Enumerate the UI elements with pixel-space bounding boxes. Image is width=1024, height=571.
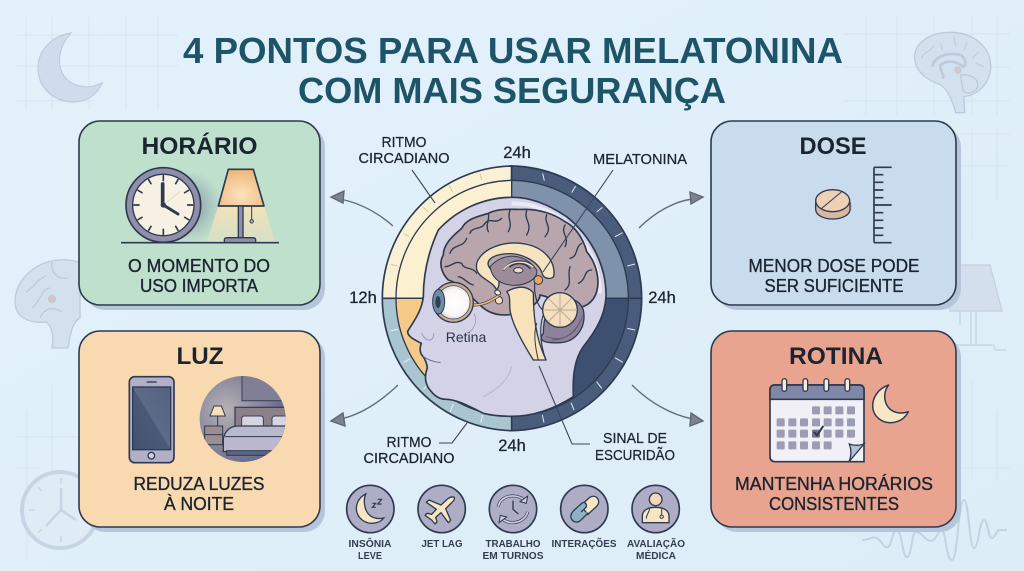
icon: dim bedroom bbox=[200, 376, 286, 462]
icon: avaliação médica: AVALIAÇÃO bbox=[627, 537, 685, 550]
text: reduza luzes à noite: REDUZA LUZES bbox=[134, 474, 264, 494]
text: mantenha horários consistentes bbox=[735, 474, 933, 514]
title: COM MAIS SEGURANÇA bbox=[298, 70, 726, 111]
label: 24h right: 24h bbox=[648, 289, 676, 307]
arrow: to dose bbox=[639, 192, 703, 228]
arrow: to rotina bbox=[632, 385, 703, 426]
decorative brain top right bbox=[914, 32, 991, 113]
icon: dose ruler bbox=[874, 167, 892, 243]
label: ritmo circadiano top: CIRCADIANO bbox=[358, 150, 450, 167]
label: 24h bottom: 24h bbox=[498, 437, 526, 455]
heading: rotina: ROTINA bbox=[789, 343, 883, 370]
text: o momento do uso importa bbox=[128, 256, 270, 296]
label: ritmo circadiano bottom bbox=[364, 434, 454, 467]
text: menor dose pode ser suficiente: MENOR DOSE PODE bbox=[748, 256, 920, 276]
inner disc: day and night quadrants bbox=[396, 180, 628, 416]
label: 24h top: 24h bbox=[503, 144, 531, 162]
label: ritmo circadiano bottom: RITMO bbox=[386, 434, 432, 451]
text: o momento do uso importa: O MOMENTO DO bbox=[128, 256, 270, 276]
label: 12h: 12h bbox=[349, 289, 377, 307]
label: sinal de escuridão: SINAL DE bbox=[603, 430, 667, 447]
decorative clock bottom left bbox=[22, 472, 98, 548]
icon: trabalho em turnos bbox=[482, 485, 544, 562]
label: sinal de escuridão bbox=[595, 430, 675, 464]
heading: luz: LUZ bbox=[176, 343, 224, 370]
text: menor dose pode ser suficiente: SER SUFICIENTE bbox=[764, 276, 904, 296]
decorative brain left bbox=[15, 260, 80, 348]
ring tick marks bbox=[391, 173, 635, 423]
icon: tablet bbox=[816, 190, 852, 219]
text: reduza luzes à noite: À NOITE bbox=[164, 494, 234, 514]
heading: horário: HORÁRIO bbox=[142, 132, 258, 160]
icon: avaliação médica: MÉDICA bbox=[636, 549, 676, 562]
icon: calendar bbox=[770, 379, 864, 462]
brain bbox=[441, 209, 598, 360]
panel: horário bbox=[79, 121, 325, 310]
outer ring: 24h quadrants bbox=[382, 166, 642, 431]
label: retina: Retina bbox=[446, 329, 486, 345]
icon: phone bbox=[129, 377, 174, 463]
arrow: to luz bbox=[331, 385, 398, 426]
text: mantenha horários consistentes: CONSISTENTES bbox=[769, 494, 899, 514]
icon: jet lag bbox=[418, 485, 465, 550]
text: o momento do uso importa: USO IMPORTA bbox=[140, 276, 258, 296]
leader lines bbox=[412, 170, 613, 444]
label: ritmo circadiano bottom: CIRCADIANO bbox=[364, 450, 454, 467]
text: menor dose pode ser suficiente bbox=[748, 256, 920, 296]
heading: dose: DOSE bbox=[800, 133, 866, 160]
head silhouette bbox=[408, 197, 606, 416]
head inner highlight bbox=[512, 203, 600, 293]
icon: trabalho em turnos: EM TURNOS bbox=[482, 550, 544, 562]
icon: insônia leve bbox=[347, 485, 394, 562]
icon: interações bbox=[552, 485, 616, 550]
text: reduza luzes à noite bbox=[134, 474, 264, 514]
icon: clock and lamp bbox=[121, 168, 279, 243]
panel: luz bbox=[79, 331, 325, 532]
title: 4 PONTOS PARA USAR MELATONINA bbox=[183, 30, 843, 71]
panel: dose bbox=[711, 121, 961, 310]
title bbox=[183, 30, 843, 111]
icon: insônia leve: LEVE bbox=[358, 550, 382, 562]
label: ritmo circadiano top: RITMO bbox=[382, 134, 426, 151]
label: ritmo circadiano top bbox=[358, 134, 450, 167]
decorative wave bottom right bbox=[862, 500, 1007, 560]
icon row: conditions bbox=[347, 485, 685, 562]
decorative lamp right bbox=[950, 265, 1006, 350]
text: mantenha horários consistentes: MANTENHA HORÁRIOS bbox=[735, 474, 933, 494]
icon: interações: INTERAÇÕES bbox=[552, 537, 616, 550]
icon: insônia leve: INSÔNIA bbox=[348, 537, 392, 550]
eye with optic nerve bbox=[433, 282, 498, 322]
panel: rotina bbox=[711, 331, 961, 532]
decorative moon bbox=[38, 33, 102, 102]
label: melatonina: MELATONINA bbox=[593, 151, 687, 168]
label: sinal de escuridão: ESCURIDÃO bbox=[595, 447, 675, 464]
chart: circadian dial with head bbox=[382, 166, 642, 431]
icon: jet lag: JET LAG bbox=[422, 538, 462, 550]
icon: crescent moon bbox=[873, 385, 908, 423]
icon: avaliação médica bbox=[627, 485, 685, 562]
arrow: to horário bbox=[331, 191, 393, 226]
icon: trabalho em turnos: TRABALHO bbox=[486, 538, 540, 550]
